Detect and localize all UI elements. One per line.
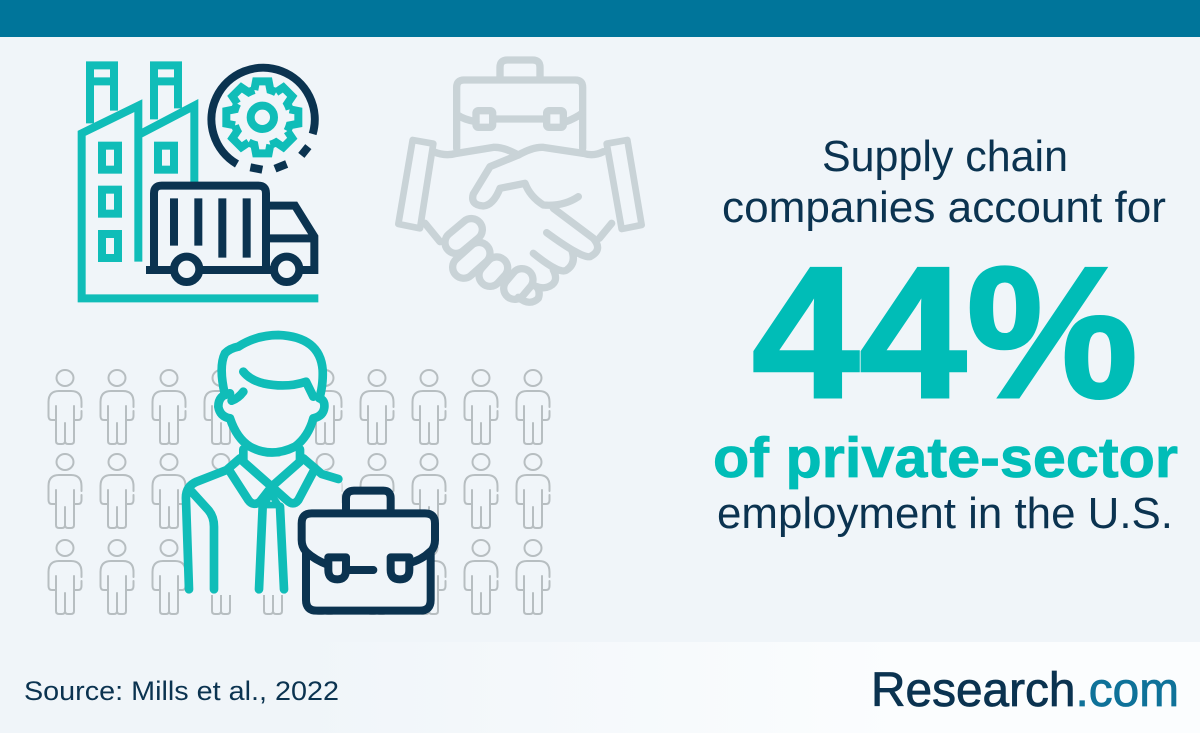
hands — [433, 147, 578, 206]
source note: Source: Mills et al., 2022 — [24, 676, 339, 706]
big statistic: 44% — [752, 228, 1138, 437]
fingers — [441, 214, 487, 258]
collar — [230, 462, 313, 504]
cuffs — [398, 140, 433, 228]
tie — [264, 493, 278, 505]
factory — [82, 65, 318, 298]
icon: businessman — [185, 335, 342, 595]
gear arc — [211, 68, 315, 170]
gear — [226, 81, 298, 153]
top bar — [0, 0, 1200, 37]
icon: handshake with briefcase — [398, 60, 642, 304]
icon: dark briefcase — [302, 491, 435, 611]
logo: Research.com: Research.com — [871, 664, 1179, 717]
footer band — [0, 642, 1200, 733]
body mask — [185, 457, 342, 595]
text: intro line 1: Supply chain — [822, 132, 1068, 181]
head — [218, 335, 324, 452]
neck and shoulders — [186, 449, 338, 589]
text: closing line: employment in the U.S. — [717, 489, 1173, 538]
text: highlighted phrase: of private-sector — [713, 426, 1178, 490]
icon: crowd of workers — [48, 370, 550, 614]
text: intro line 2: companies account for — [722, 183, 1166, 232]
briefcase — [457, 60, 583, 148]
truck — [146, 186, 318, 282]
icon: factory, gear and truck — [82, 65, 318, 298]
